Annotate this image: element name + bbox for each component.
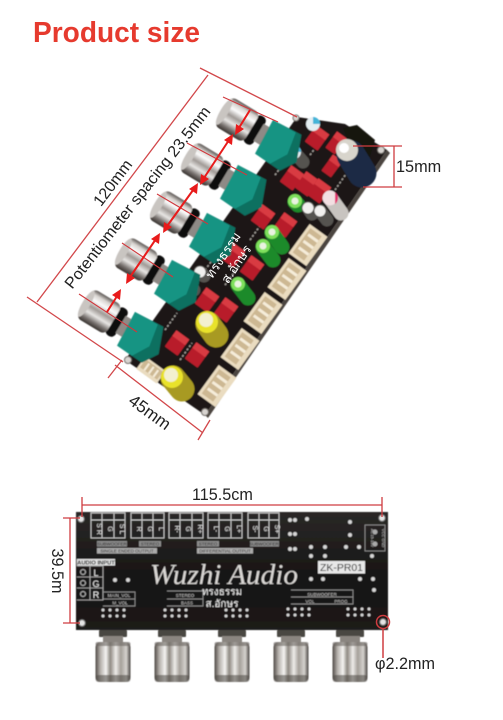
terminal labels: R- [173,525,180,533]
power label block: AC15-18V [370,529,375,548]
connectors row [136,224,327,407]
power terminal [343,125,375,157]
terminal labels: G [223,526,230,532]
mount holes on flat board [78,515,386,626]
label 115.5cm: 115.5cm [192,486,253,504]
potentiometers with chrome knobs [72,93,310,368]
electrolytic capacitors [161,117,362,389]
terminal labels: S+ [273,525,280,533]
output labels: SUBWOOFER [97,542,127,546]
flat PCB [76,512,388,630]
logo script: Wuzhi Audio [150,560,298,591]
output labels: DIFFERENTIAL OUTPUT [199,548,251,554]
photo: front view of board [76,512,388,682]
dimension: 115.5cm [82,497,382,517]
terminal labels: R+ [196,524,203,534]
volume labels: BASS [181,600,193,606]
knobs row [96,630,368,682]
output labels: SINGLE ENDED OUTPUT [100,548,154,554]
terminal labels: L+ [235,525,242,533]
terminal labels: G [106,526,113,532]
volume labels: STEREO [176,593,195,598]
dimension: 45mm [108,360,210,440]
mounting holes [124,115,384,416]
label 15mm: 15mm [396,158,441,176]
watermark on flat board [202,587,242,610]
terminal labels: S R [95,523,102,535]
PCB board [125,117,387,415]
spacing arrows [107,110,250,312]
red capacitors [165,125,347,368]
watermark on angled board [202,229,257,290]
title: Product size [33,17,200,49]
terminal labels: G [184,526,191,532]
output labels: STEREO [141,542,160,546]
hole callout [376,616,390,658]
audio input block: R [93,590,100,600]
volume labels: M_VOL [112,600,128,606]
terminal labels: G [262,526,269,532]
terminal blocks [91,513,279,538]
audio input block [77,559,115,600]
label hole diameter: φ2.2mm [375,655,435,673]
power label block [365,525,386,551]
potentiometer axis lines [79,97,278,332]
volume labels: PROG [334,599,348,604]
watermark on flat board: ทรงธรรม [202,587,242,598]
volume labels [103,590,353,606]
watermark on angled board: ส.อักษร [218,242,254,286]
output labels: SUBWOOFER [249,542,279,546]
terminal labels: L [157,527,164,531]
watermark on flat board: ส.อักษร [206,599,239,610]
power label block: VCC GND [381,529,386,547]
terminal labels: S- [251,526,258,533]
terminal labels [95,523,280,535]
label potentiometer spacing: Potentiometer spacing 23.5mm [62,104,214,292]
model label: ZK-PR01 [320,562,363,574]
terminal labels: L- [212,526,219,533]
volume labels: MAIN_VOL [108,593,131,598]
solder pads [102,517,376,618]
terminal labels: S L [118,524,125,534]
dimension: 15mm [353,146,402,187]
terminal labels: G [146,526,153,532]
watermark on angled board: ทรงธรรม [202,229,244,281]
audio input block: AUDIO INPUT [77,560,115,566]
volume labels: VOL [305,599,315,604]
volume labels: SUBWOOFER [307,592,337,597]
audio input block: G [92,579,100,589]
terminal labels: R [135,526,142,532]
silkscreen marks [165,136,359,360]
label 120mm: 120mm [91,157,136,210]
dimension: 120mm [27,68,297,362]
audio input block: L [93,568,99,578]
dimension: 39.5m [63,518,80,623]
label 39.5m: 39.5m [48,548,66,594]
output labels [97,541,279,554]
photo: angled circuit board [72,93,390,418]
output labels: STEREO [199,542,218,546]
label 45mm: 45mm [125,391,174,434]
